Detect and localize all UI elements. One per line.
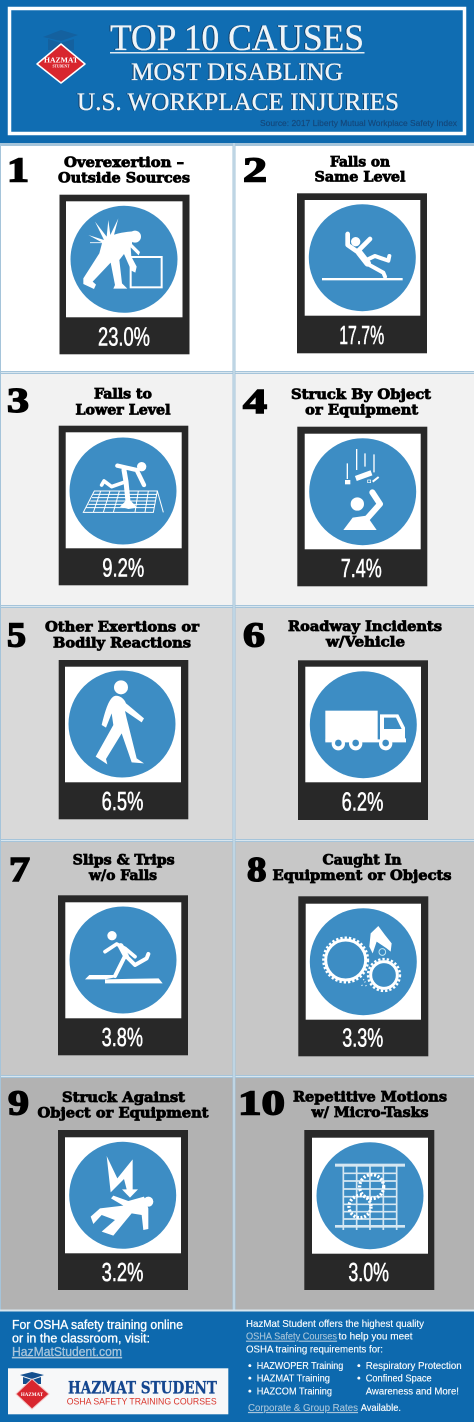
heading 6: Roadway Incidents (288, 619, 442, 635)
card 1 (60, 195, 190, 354)
card 2 (297, 193, 427, 353)
card 9 (58, 1130, 188, 1290)
heading 9: Struck Against (62, 1090, 186, 1106)
logo card: OSHA SAFETY TRAINING COURSES (67, 1396, 217, 1406)
percentage 1: 23.0% (98, 322, 150, 352)
panel: cause 5 (0, 607, 234, 840)
training list right (357, 1360, 462, 1397)
heading 2: Falls on (330, 154, 390, 170)
call to action text: HazMatStudent.com (12, 1344, 122, 1359)
card 3 (59, 426, 188, 585)
heading 5: Bodily Reactions (53, 635, 191, 651)
group rates: Corporate & Group Rates (248, 1402, 358, 1414)
rank number 6: 6 (243, 616, 265, 654)
percentage 8: 3.3% (342, 1023, 383, 1053)
panel: cause 8 (235, 842, 474, 1075)
logo: Hazmat Student (37, 30, 85, 83)
logo card: HAZMAT STUDENT (68, 1379, 217, 1399)
training list right: • (357, 1360, 361, 1372)
heading 3 (76, 386, 170, 418)
training list left: • (248, 1360, 252, 1372)
heading 1: Outside Sources (58, 170, 190, 186)
group rates: Available. (361, 1402, 401, 1414)
training list left: • (248, 1373, 252, 1385)
training list left (248, 1360, 343, 1397)
rank number 8: 8 (247, 850, 266, 889)
icon: overexertion (83, 218, 162, 289)
panel: cause 1 (0, 146, 234, 372)
card 4 (297, 427, 427, 586)
icon: repetitive motion mesh (335, 1164, 405, 1230)
heading 2 (314, 154, 406, 186)
training list right: Respiratory Protection (366, 1360, 462, 1372)
percentage 2: 17.7% (339, 320, 384, 350)
rank number 1: 1 (7, 150, 29, 190)
training list right: • (357, 1373, 361, 1385)
heading 5 (45, 620, 200, 651)
heading 1: Overexertion – (64, 155, 184, 171)
icon: truck (325, 711, 406, 750)
subtitle line 1: MOST DISABLING (131, 59, 343, 86)
logo: Hazmat Student: HAZMAT (44, 58, 79, 64)
title: TOP 10 CAUSES (110, 18, 364, 59)
percentage 3: 9.2% (102, 552, 144, 582)
icon: fall on same level (322, 234, 403, 280)
heading 10: w/ Micro-Tasks (310, 1105, 429, 1121)
percentage 4: 7.4% (341, 553, 382, 583)
heading 2: Same Level (314, 170, 406, 186)
header banner (0, 0, 474, 143)
call to action text (12, 1317, 183, 1359)
course description: OSHA training requirements for: (246, 1344, 383, 1356)
panel: cause 7 (0, 842, 234, 1075)
card 5 (59, 660, 188, 819)
rank number 10: 10 (238, 1084, 285, 1122)
rank number 3: 3 (7, 381, 29, 420)
heading 8: Equipment or Objects (272, 868, 452, 884)
call to action text: For OSHA safety training online (12, 1317, 183, 1332)
heading 4: or Equipment (305, 402, 419, 418)
heading 4 (291, 387, 432, 418)
logo card: HAZMAT (21, 1393, 44, 1398)
heading 6 (288, 619, 442, 650)
rank number 9: 9 (8, 1084, 29, 1122)
card 7 (58, 895, 188, 1055)
percentage 7: 3.8% (102, 1022, 143, 1052)
heading 7: Slips & Trips (73, 852, 175, 868)
panel: cause 10 (235, 1077, 474, 1310)
percentage 5: 6.5% (102, 786, 143, 816)
heading 6: w/Vehicle (325, 634, 405, 650)
icon: struck by falling object (343, 449, 380, 530)
percentage 6: 6.2% (342, 787, 383, 817)
training list left: HAZWOPER Training (257, 1360, 343, 1372)
heading 9 (38, 1090, 209, 1122)
training list left: HAZCOM Training (257, 1385, 332, 1397)
call to action text: or in the classroom, visit: (12, 1331, 150, 1346)
icon: struck against (91, 1156, 153, 1236)
card 10 (304, 1130, 434, 1290)
logo card (8, 1368, 228, 1414)
heading 7 (73, 852, 175, 884)
heading 7: w/o Falls (88, 868, 157, 884)
icon: fall from roof (83, 462, 163, 512)
course description: OSHA Safety Courses (246, 1331, 337, 1343)
training list right: Confined Space (366, 1373, 432, 1385)
heading 10: Repetitive Motions (293, 1090, 447, 1106)
heading 1 (58, 155, 190, 186)
icon: walking person (96, 680, 144, 764)
percentage 9: 3.2% (102, 1257, 143, 1287)
icon: slip and trip (85, 931, 163, 983)
training list left: HAZMAT Training (257, 1373, 330, 1385)
card 8 (298, 896, 428, 1056)
rank number 7: 7 (9, 850, 30, 889)
subtitle line 2: U.S. WORKPLACE INJURIES (77, 89, 399, 116)
footer (0, 1310, 474, 1422)
training list left: • (248, 1385, 252, 1397)
panel: cause 6 (235, 607, 474, 840)
training list right: Awareness and More! (366, 1385, 459, 1397)
panel: cause 9 (0, 1077, 234, 1310)
rank number 4: 4 (243, 382, 267, 421)
heading 10 (293, 1090, 447, 1121)
heading 3: Lower Level (76, 402, 170, 418)
heading 8 (272, 852, 452, 884)
source: Source: 2017 Liberty Mutual Workplace Safety Index (260, 118, 458, 128)
logo: Hazmat Student: STUDENT (53, 64, 70, 68)
heading 5: Other Exertions or (45, 620, 200, 636)
course description: HazMat Student offers the highest quality (246, 1318, 425, 1330)
rank number 2: 2 (243, 150, 267, 190)
percentage 10: 3.0% (348, 1257, 389, 1287)
heading 3: Falls to (94, 386, 152, 402)
heading 8: Caught In (322, 852, 402, 868)
card 6 (298, 660, 428, 820)
panel: cause 4 (235, 373, 474, 605)
icon: caught in gears (323, 926, 400, 991)
panel: cause 2 (235, 146, 474, 372)
heading 4: Struck By Object (291, 387, 432, 403)
panel: cause 3 (0, 373, 234, 605)
rank number 5: 5 (7, 616, 26, 654)
heading 9: Object or Equipment (38, 1106, 209, 1122)
course description: to help you meet (338, 1331, 413, 1343)
course description (246, 1318, 425, 1356)
